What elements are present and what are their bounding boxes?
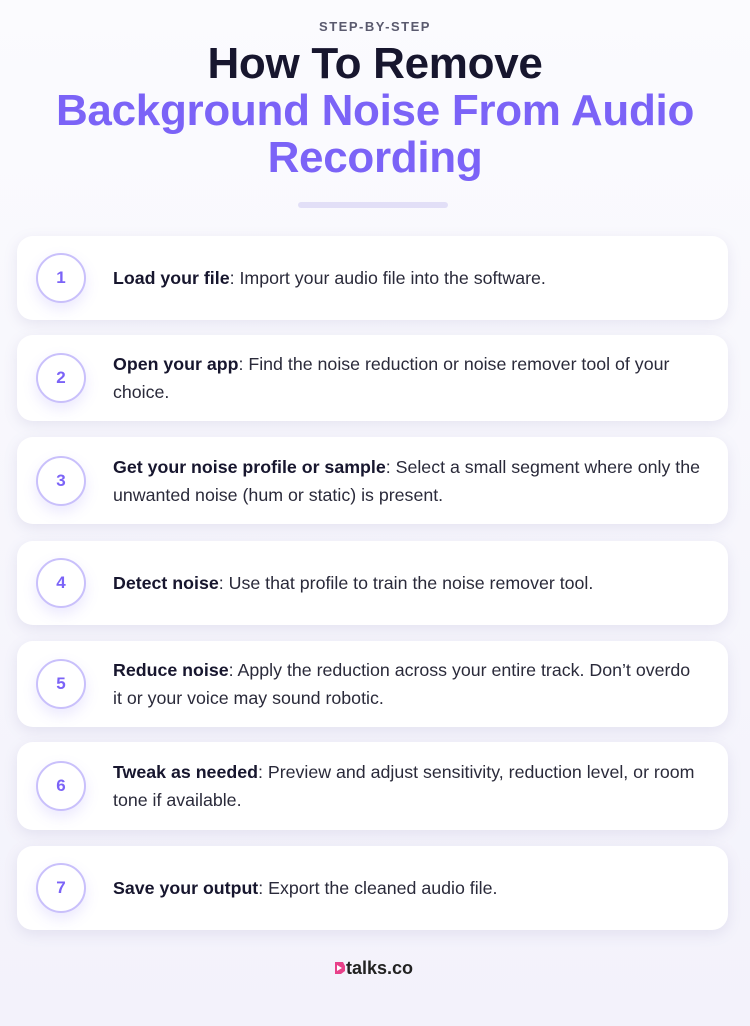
card: step 3: 3 [56,470,66,490]
logo: talks.co [346,958,413,978]
kicker: STEP-BY-STEP [319,19,431,34]
card: step 5 [17,641,728,727]
title [56,39,694,182]
card: step 3: Get your noise profile or sample: Select a small segment where only the unwanted noise (hum or static) is present. [113,456,700,504]
card: step 5: Reduce noise: Apply the reduction across your entire track. Don’t overdo [113,660,690,680]
title: Recording [268,133,482,182]
card: step 7: 7 [56,878,66,897]
card: step 6: 6 [56,776,66,795]
card: step 3 [17,437,728,524]
card: step 4 [17,541,728,625]
card: step 2: 2 [56,368,66,387]
title: Background Noise From Audio [56,86,694,135]
card: step 1: 1 [56,268,66,287]
card: step 5: it or your voice may sound robotic. [113,688,384,708]
card: step 7: Save your output: Export the cleaned audio file. [113,878,497,898]
card: step 5: 5 [56,674,66,693]
card: step 7 [17,846,728,930]
card: step 6 [17,742,728,830]
card: step 4: Detect noise: Use that profile to train the noise remover tool. [113,573,593,593]
card: step 6: Tweak as needed: Preview and adjust sensitivity, reduction level, or room tone if available. [113,762,694,810]
card: step 2: Open your app: Find the noise reduction or noise remover tool of your choice. [113,354,669,402]
card: step 2 [17,335,728,421]
card: step 1: Load your file: Import your audio file into the software. [113,268,546,288]
divider bar [298,202,448,208]
card: step 1 [17,236,728,320]
card: step 4: 4 [56,573,66,592]
title: How To Remove [207,39,543,88]
